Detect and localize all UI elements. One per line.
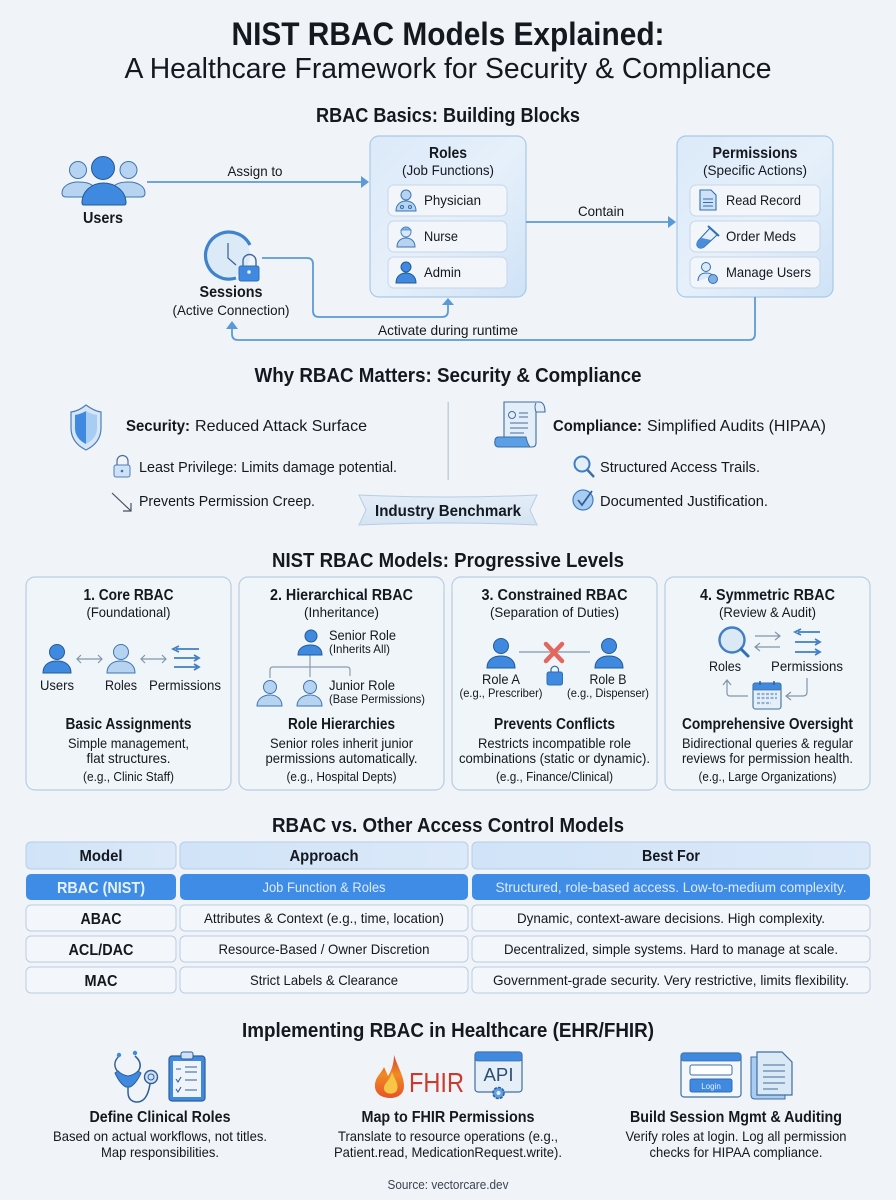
panel: 1. Core RBAC <box>26 577 231 790</box>
icon: document stack <box>751 1052 792 1099</box>
review cycle diagram: Roles <box>709 658 741 674</box>
table header row: Model <box>80 848 122 865</box>
label: Sessions: (Active Connection) <box>172 302 290 318</box>
table row: MAC: Strict Labels & Clearance <box>250 972 398 988</box>
panel: 3. Constrained RBAC: 3. Constrained RBAC <box>482 587 628 604</box>
text: role hierarchies: Role Hierarchies <box>288 716 395 733</box>
arrow: session to roles <box>262 258 454 317</box>
text: role hierarchies <box>266 716 418 784</box>
panel: Permissions: (Specific Actions) <box>703 162 807 178</box>
text: access trails: Structured Access Trails. <box>600 459 760 476</box>
text: define clinical roles: Based on actual workflows, not titles. <box>53 1128 267 1144</box>
panel: Permissions <box>677 136 833 297</box>
text: basic assignments: Basic Assignments <box>66 716 192 733</box>
panel: 3. Constrained RBAC <box>452 577 657 790</box>
text: role hierarchies: Senior roles inherit junior <box>270 735 413 751</box>
title <box>124 16 772 85</box>
role: Nurse: Nurse <box>424 228 458 244</box>
role: Physician: Physician <box>424 192 481 208</box>
text: security headline: Reduced Attack Surface <box>195 418 367 435</box>
banner: industry benchmark: Industry Benchmark <box>375 503 521 520</box>
table row: ACL/DAC: ACL/DAC <box>68 942 134 959</box>
text: comprehensive oversight: (e.g., Large Organizations) <box>698 769 836 784</box>
role: Admin: Admin <box>424 264 461 280</box>
text: compliance headline: Simplified Audits (HIPAA) <box>647 418 826 435</box>
table row: RBAC: Structured, role-based access. Low-to-medium complexity. <box>496 879 846 895</box>
icon: document scroll <box>495 402 545 447</box>
arrow: assign to <box>147 176 369 188</box>
icon: login window: Login <box>701 1082 721 1091</box>
label: Activate during runtime: Activate during runtime <box>378 322 518 338</box>
text: prevents conflicts: combinations (static or dynamic). <box>459 750 650 766</box>
panel: session management and auditing <box>626 1052 846 1160</box>
permission: Order Meds <box>690 221 820 252</box>
hierarchy diagram: Junior Role <box>329 677 395 693</box>
permission: Read Record <box>690 185 820 216</box>
flow diagram: users roles permissions: Users <box>40 677 74 693</box>
arrow: contain <box>526 216 676 228</box>
heading: RBAC Basics: RBAC Basics: Building Blocks <box>316 105 580 127</box>
panel: 4. Symmetric RBAC <box>665 577 870 790</box>
panel: 4. Symmetric RBAC: (Review & Audit) <box>719 604 816 620</box>
text: basic assignments: flat structures. <box>86 750 170 766</box>
role: Physician <box>388 185 507 216</box>
panel: 2. Hierarchical RBAC: 2. Hierarchical RBAC <box>270 587 413 604</box>
text: least privilege: Least Privilege: Limits damage potential. <box>139 459 397 476</box>
source note: Source: vectorcare.dev <box>388 1177 509 1192</box>
text: map to FHIR permissions: Patient.read, MedicationRequest.write). <box>334 1144 562 1160</box>
text: map to FHIR permissions: Translate to resource operations (e.g., <box>338 1128 558 1144</box>
label: Sessions: Sessions <box>200 284 263 301</box>
icon: session clock with lock <box>206 232 259 281</box>
icon: login window <box>681 1053 741 1097</box>
review cycle diagram: Permissions <box>771 658 843 674</box>
table row: RBAC <box>26 874 870 900</box>
title: NIST RBAC Models Explained: <box>232 16 664 52</box>
text: compliance headline <box>553 418 826 435</box>
flow diagram: users roles permissions: Roles <box>105 677 137 693</box>
text: security headline: Security: <box>126 418 190 435</box>
review cycle diagram <box>709 628 843 709</box>
table row: RBAC: Job Function & Roles <box>262 879 386 895</box>
text: define clinical roles <box>53 1109 267 1160</box>
hierarchy diagram: (Base Permissions) <box>329 692 425 706</box>
text: build session management: Verify roles at login. Log all permission <box>626 1128 846 1144</box>
text: map to FHIR permissions: Map to FHIR Permissions <box>362 1109 535 1126</box>
hierarchy diagram <box>257 627 425 706</box>
hierarchy diagram: (Inherits All) <box>329 642 390 656</box>
icon: down arrow <box>112 493 131 511</box>
panel: 4. Symmetric RBAC: 4. Symmetric RBAC <box>700 587 835 604</box>
text: build session management: checks for HIPAA compliance. <box>650 1144 822 1160</box>
icon: shield <box>71 405 101 450</box>
label: Sessions <box>172 284 290 318</box>
text: build session management <box>626 1109 846 1160</box>
icon: clipboard <box>169 1052 205 1101</box>
hierarchy diagram: Senior Role <box>329 627 396 643</box>
panel: 2. Hierarchical RBAC: (Inheritance) <box>304 604 379 620</box>
role: Admin <box>388 257 507 288</box>
icon: users group <box>62 156 145 205</box>
table row: MAC: Government-grade security. Very restrictive, limits flexibility. <box>493 972 849 988</box>
text: map to FHIR permissions <box>334 1109 562 1160</box>
panel: Roles: Roles <box>429 145 467 162</box>
arrow: permissions to sessions <box>226 297 755 340</box>
panel: 1. Core RBAC: 1. Core RBAC <box>84 587 174 604</box>
role: Nurse <box>388 221 507 252</box>
heading: Why RBAC Matters: Why RBAC Matters: Security & Compliance <box>254 365 642 387</box>
text: prevents conflicts <box>459 716 650 784</box>
icon: magnifier <box>574 456 594 477</box>
table row: ABAC: ABAC <box>80 911 122 928</box>
table row: ABAC: Dynamic, context-aware decisions. High complexity. <box>517 910 825 926</box>
label: Contain: Contain <box>578 203 624 219</box>
table row: ACL/DAC: Resource-Based / Owner Discretion <box>218 941 430 957</box>
heading: implementing RBAC: Implementing RBAC in Healthcare (EHR/FHIR) <box>242 1020 654 1042</box>
text: comprehensive oversight: Comprehensive Oversight <box>682 716 854 733</box>
flow diagram: users roles permissions: Permissions <box>149 677 221 693</box>
panel: Roles <box>370 136 526 297</box>
text: build session management: Build Session Mgmt & Auditing <box>630 1109 842 1126</box>
table row: RBAC: RBAC (NIST) <box>57 880 145 897</box>
separation diagram: (e.g., Prescriber) <box>460 686 542 700</box>
text: role hierarchies: permissions automatically. <box>266 750 418 766</box>
icon: API window with gear: API <box>484 1065 514 1085</box>
text: compliance headline: Compliance: <box>553 418 642 435</box>
table row: ACL/DAC <box>26 936 870 962</box>
table header row <box>26 842 870 869</box>
text: comprehensive oversight: Bidirectional queries & regular <box>682 735 853 751</box>
permission: Read Record: Read Record <box>726 192 801 208</box>
title: A Healthcare Framework for Security & Compliance <box>124 53 772 85</box>
text: define clinical roles: Define Clinical Roles <box>90 1109 231 1126</box>
table header row: Best For <box>642 848 700 865</box>
icon: API window with gear <box>475 1052 522 1098</box>
text: prevents conflicts: Prevents Conflicts <box>494 716 615 733</box>
label: Users: Users <box>83 210 123 227</box>
text: define clinical roles: Map responsibilities. <box>101 1144 219 1160</box>
panel: Roles: (Job Functions) <box>402 162 494 178</box>
panel: Permissions: Permissions <box>712 145 798 162</box>
flow diagram: users roles permissions <box>40 644 221 693</box>
icon: check badge <box>573 490 593 510</box>
separation diagram: Role B <box>590 671 626 687</box>
text: FHIR logo: FHIR <box>409 1067 464 1098</box>
permission: Order Meds: Order Meds <box>726 228 796 244</box>
panel: 1. Core RBAC: (Foundational) <box>86 604 170 620</box>
icon: FHIR flame <box>375 1055 404 1098</box>
text: comprehensive oversight <box>682 716 854 784</box>
text: comprehensive oversight: reviews for permission health. <box>682 750 853 766</box>
text: basic assignments: (e.g., Clinic Staff) <box>83 769 174 784</box>
table row: ABAC: Attributes & Context (e.g., time, location) <box>204 910 444 926</box>
panel: RBAC basics diagram <box>62 136 833 340</box>
icon: padlock <box>114 456 130 477</box>
separation diagram: (e.g., Dispenser) <box>567 686 649 700</box>
panel: 3. Constrained RBAC: (Separation of Duties) <box>490 604 619 620</box>
panel: why RBAC matters <box>71 402 826 525</box>
separation diagram <box>460 638 649 700</box>
text: role hierarchies: (e.g., Hospital Depts) <box>286 769 396 784</box>
panel: define clinical roles <box>53 1051 267 1160</box>
permission: Manage Users <box>690 257 820 288</box>
banner: industry benchmark <box>359 495 537 525</box>
table row: MAC <box>26 967 870 993</box>
table: access control comparison <box>26 842 870 993</box>
table row: MAC: MAC <box>84 973 118 990</box>
icon: stethoscope <box>115 1051 158 1102</box>
table row: ACL/DAC: Decentralized, simple systems. Hard to manage at scale. <box>504 941 838 957</box>
text: basic assignments: Simple management, <box>68 735 189 751</box>
label: Assign to: Assign to <box>228 163 283 179</box>
heading: comparison table: RBAC vs. Other Access Control Models <box>272 815 624 837</box>
text: permission creep: Prevents Permission Creep. <box>139 493 315 510</box>
text: basic assignments <box>66 716 192 784</box>
panel: 2. Hierarchical RBAC <box>239 577 444 790</box>
separation diagram: Role A <box>482 671 521 687</box>
permission: Manage Users: Manage Users <box>726 264 811 280</box>
text: documented justification: Documented Justification. <box>600 493 768 510</box>
heading: NIST RBAC Models: NIST RBAC Models: Progressive Levels <box>272 550 624 572</box>
panel: map to FHIR permissions <box>334 1052 562 1160</box>
table header row: Approach <box>290 848 358 865</box>
text: prevents conflicts: (e.g., Finance/Clinical) <box>496 769 613 784</box>
text: prevents conflicts: Restricts incompatible role <box>478 735 631 751</box>
table row: ABAC <box>26 905 870 931</box>
